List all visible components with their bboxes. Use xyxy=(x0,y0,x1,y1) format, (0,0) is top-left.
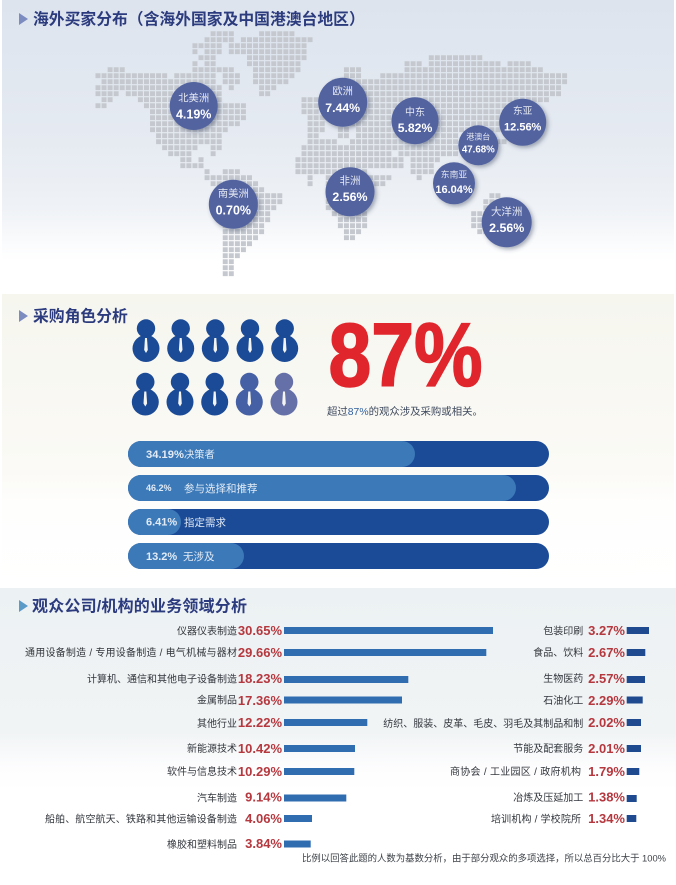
bubble: Southeast Asia: 16.04% xyxy=(435,184,473,196)
bubble: South America: 南美洲 xyxy=(218,187,249,200)
left chart: sector labels: 软件与信息技术 xyxy=(167,765,237,778)
bubble: Middle East xyxy=(392,97,438,144)
bar: specify requirements xyxy=(110,509,549,535)
right chart: sector percentages: 2.02% xyxy=(588,715,625,730)
bar: specify requirements: 6.41% xyxy=(146,516,177,528)
right chart: sector labels: 冶炼及压延加工 xyxy=(513,791,583,804)
right chart: sector labels: 节能及配套服务 xyxy=(513,742,583,755)
left chart: sector percentages: 29.66% xyxy=(238,645,282,660)
bar: participate in selection xyxy=(110,475,549,501)
right chart: sector labels: 培训机构 / 学校院所 xyxy=(491,812,581,826)
panel: business sector analysis xyxy=(19,596,666,864)
right chart: sector percentages: 3.27% xyxy=(588,623,625,638)
right chart: sector percentages: 2.29% xyxy=(588,693,625,708)
bubble: North America: 4.19% xyxy=(176,108,211,122)
right chart: sector percentages: 1.38% xyxy=(588,790,625,804)
left chart: sector labels: 金属制品 xyxy=(197,694,237,706)
bubble: North America xyxy=(170,82,218,130)
bubble: South America: 0.70% xyxy=(216,203,251,217)
left chart: sector percentages: 4.06% xyxy=(245,811,282,826)
left chart: sector labels xyxy=(25,624,237,851)
right chart: sector percentages: 1.79% xyxy=(588,764,625,779)
bar: participate in selection: 46.2% xyxy=(146,483,172,493)
right chart: sector labels: 包装印刷 xyxy=(543,624,583,638)
heading: overseas buyers: 海外买家分布（含海外国家及中国港澳台地区） xyxy=(33,10,365,28)
bubble: East Asia: 12.56% xyxy=(504,122,542,134)
bar: specify requirements: 指定需求 xyxy=(184,516,226,529)
left chart: sector labels: 通用设备制造 / 专用设备制造 / 电气机械与器材 xyxy=(25,646,237,659)
bubble: North America: 北美洲 xyxy=(178,92,209,105)
left chart: sector labels: 计算机、通信和其他电子设备制造 xyxy=(87,672,237,686)
bubble: Hong Kong Macao Taiwan xyxy=(458,125,498,165)
left chart: sector labels: 汽车制造 xyxy=(197,792,237,804)
bar: not involved: 无涉及 xyxy=(183,550,215,563)
heading: purchasing role: 采购角色分析 xyxy=(33,306,128,326)
bubble: Southeast Asia xyxy=(433,162,475,204)
bar: not involved: 13.2% xyxy=(146,551,177,563)
left chart: sector percentages: 18.23% xyxy=(238,671,282,686)
footnote: 比例以回答此题的人数为基数分析，由于部分观众的多项选择，所以总百分比大于 100% xyxy=(302,852,666,864)
left chart: sector percentages: 17.36% xyxy=(238,693,282,708)
bubble: Oceania: 2.56% xyxy=(489,221,524,235)
caption: 87% involved in purchasing: 超过87%的观众涉及采购或相关。 xyxy=(327,405,483,418)
right chart: sector bars xyxy=(627,627,649,822)
bubble: South America xyxy=(209,180,258,229)
bar: not involved xyxy=(110,543,549,569)
bubble: Europe xyxy=(318,78,367,127)
bubble: Oceania xyxy=(482,197,532,247)
big number 87%: 87% xyxy=(328,306,482,406)
right chart: sector percentages: 1.34% xyxy=(588,811,625,826)
right chart: sector labels: 生物医药 xyxy=(543,672,583,685)
right chart: sector percentages: 2.57% xyxy=(588,671,625,686)
right chart: sector percentages: 2.01% xyxy=(588,741,625,756)
bubble: Oceania: 大洋洲 xyxy=(491,205,522,218)
bubble: Europe: 7.44% xyxy=(325,101,360,115)
bubble: Middle East: 中东 xyxy=(405,105,425,118)
left chart: sector percentages: 9.14% xyxy=(245,790,282,804)
left chart: sector percentages: 10.29% xyxy=(238,764,282,779)
right chart: sector labels: 食品、饮料 xyxy=(533,646,583,659)
bubble: Africa: 2.56% xyxy=(332,190,368,204)
icon row: people top xyxy=(132,319,298,362)
left chart: sector percentages: 30.65% xyxy=(238,623,282,638)
panel: purchasing role analysis xyxy=(19,306,549,569)
bubble: Southeast Asia: 东南亚 xyxy=(441,168,467,180)
bubble: Hong Kong Macao Taiwan: 47.68% xyxy=(462,144,495,155)
bubble: Europe: 欧洲 xyxy=(332,85,353,97)
bubble: East Asia: 东亚 xyxy=(513,104,533,117)
right chart: sector percentages xyxy=(588,623,625,826)
bar: decision maker: 34.19%决策者 xyxy=(146,448,215,461)
bar: participate in selection: 参与选择和推荐 xyxy=(184,482,258,495)
right chart: sector labels: 商协会 / 工业园区 / 政府机构 xyxy=(450,765,581,778)
bubble: Middle East: 5.82% xyxy=(398,121,432,135)
left chart: sector percentages xyxy=(238,623,282,851)
left chart: sector percentages: 10.42% xyxy=(238,741,282,756)
left chart: sector labels: 船舶、航空航天、铁路和其他运输设备制造 xyxy=(45,812,237,826)
left chart: sector labels: 橡胶和塑料制品 xyxy=(167,838,237,851)
bubble: East Asia xyxy=(499,99,546,146)
bubble: Africa xyxy=(326,167,374,216)
right chart: sector percentages: 2.67% xyxy=(588,645,625,660)
heading: business sectors: 观众公司/机构的业务领域分析 xyxy=(32,596,247,616)
right chart: sector labels xyxy=(383,624,583,826)
left chart: sector labels: 仪器仪表制造 xyxy=(177,624,237,638)
left chart: sector labels: 新能源技术 xyxy=(187,742,237,755)
left chart: sector percentages: 12.22% xyxy=(238,715,282,730)
icon row: people bottom xyxy=(132,373,298,416)
bar: decision maker xyxy=(110,441,549,467)
right chart: sector labels: 纺织、服装、皮革、毛皮、羽毛及其制品和制 xyxy=(383,717,583,730)
bubble: Hong Kong Macao Taiwan: 港澳台 xyxy=(466,132,490,142)
bubble: Africa: 非洲 xyxy=(340,175,360,187)
left chart: sector labels: 其他行业 xyxy=(197,717,237,730)
left chart: sector percentages: 3.84% xyxy=(245,836,282,851)
dotted world map xyxy=(96,34,567,274)
left chart: sector bars xyxy=(284,627,493,848)
right chart: sector labels: 石油化工 xyxy=(543,694,583,707)
panel: overseas buyers distribution xyxy=(19,10,567,274)
